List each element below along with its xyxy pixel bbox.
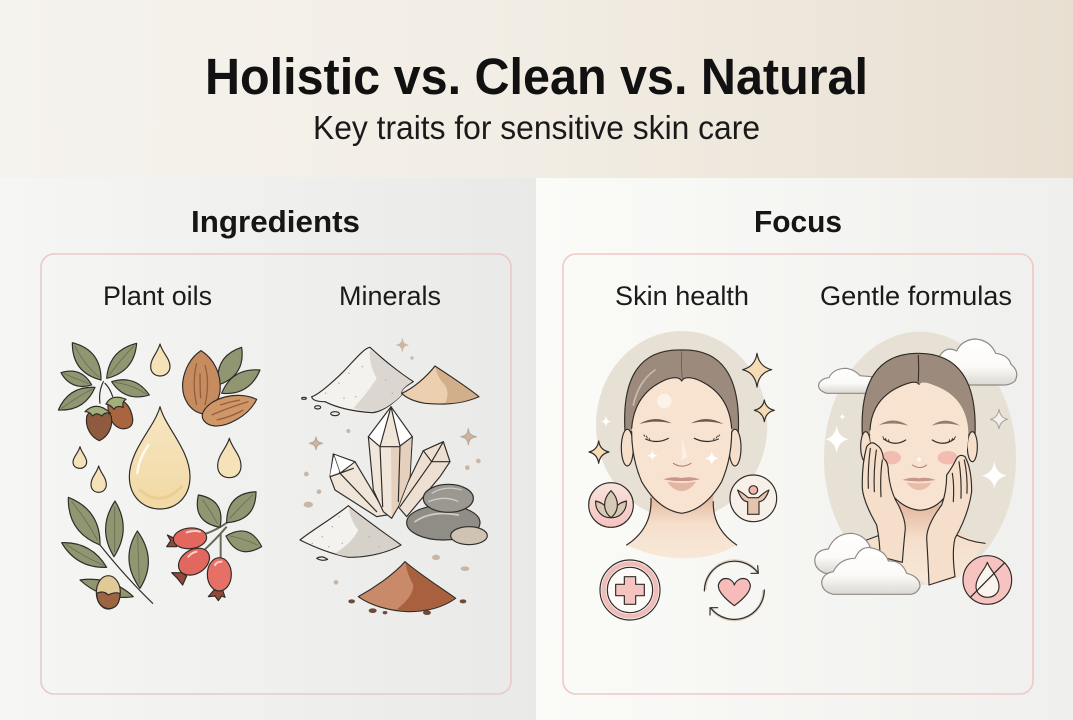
icon: stacked stones	[407, 484, 487, 545]
icon: clouds bottom	[815, 533, 920, 594]
icon: heart with renewal arrows	[704, 561, 764, 620]
icon: gold sparkles	[589, 353, 774, 463]
illustration: skin health	[589, 331, 777, 620]
label: skin health: Skin health	[615, 281, 749, 311]
panel background: ingredients	[0, 178, 536, 720]
icon: large oil drop	[129, 407, 190, 509]
icon: lotus badge	[589, 483, 633, 527]
icon: red-brown powder pile	[348, 562, 466, 615]
backdrop oval	[824, 332, 1016, 585]
icon: small oil drops	[73, 344, 241, 492]
icon: white powder pile	[312, 347, 413, 413]
frame: focus	[563, 254, 1033, 694]
title: Holistic vs. Clean vs. Natural	[205, 48, 868, 105]
icon: rosehip branch	[167, 492, 262, 601]
icon: woman touching her face	[861, 353, 985, 585]
icon: grey powder pile	[300, 506, 401, 560]
icon: medical cross badge	[600, 560, 660, 620]
icon: woman face with glowing skin	[601, 350, 741, 558]
subtitle: Key traits for sensitive skin care	[313, 109, 760, 146]
label: minerals: Minerals	[339, 281, 441, 311]
heading: focus: Focus	[754, 204, 842, 239]
icon: clouds top	[819, 339, 1017, 393]
icon: tan powder pile	[402, 366, 479, 404]
header band	[0, 0, 1073, 178]
icon: sparkles and grains	[302, 338, 481, 585]
icon: no-oil badge	[963, 556, 1012, 604]
frame: ingredients	[41, 254, 511, 694]
illustration: plant oils	[58, 343, 262, 609]
icon: jojoba leaf sprig	[62, 497, 153, 609]
label: gentle formulas: Gentle formulas	[820, 281, 1012, 311]
illustration: minerals	[300, 338, 487, 615]
heading: ingredients: Ingredients	[191, 204, 360, 239]
icon: wellbeing person badge	[730, 475, 777, 522]
icon: crystal cluster	[330, 407, 450, 518]
panel background: focus	[536, 178, 1073, 720]
backdrop oval	[596, 331, 767, 519]
icon: jojoba branch with nuts	[58, 343, 149, 441]
label: plant oils: Plant oils	[103, 281, 212, 311]
icon: almonds with leaves	[183, 347, 260, 426]
icon: white sparkles	[826, 409, 1008, 489]
illustration: gentle formulas	[815, 332, 1017, 604]
